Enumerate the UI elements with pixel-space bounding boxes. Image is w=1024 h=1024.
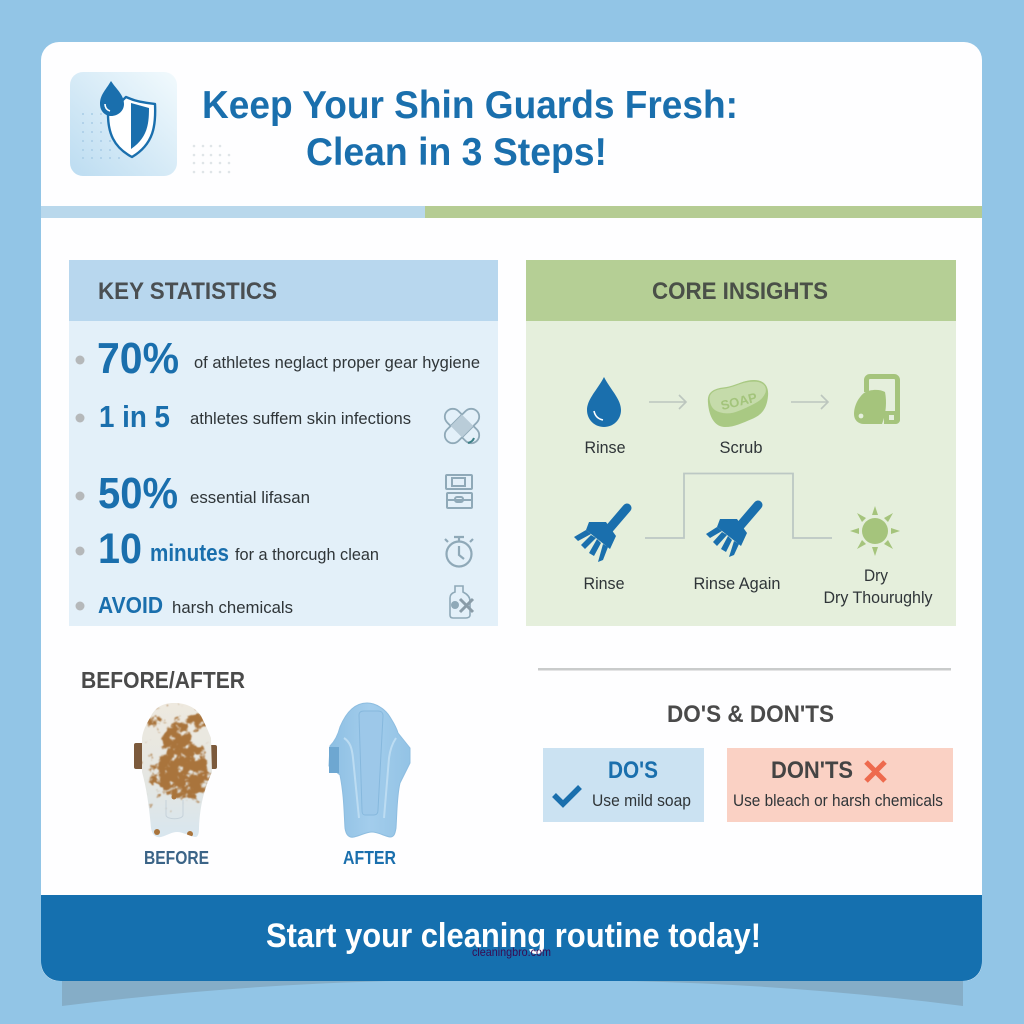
panel: don'ts: DON'TS: [771, 757, 853, 784]
stat rows: harsh chemicals: [172, 598, 293, 617]
arrow: [649, 395, 686, 409]
watermark: cleaningbro.com: [472, 945, 551, 959]
icon: check mark: [554, 787, 580, 804]
icon: stopwatch: [445, 537, 473, 566]
shin guard: after: [329, 703, 410, 837]
heading: do's and don'ts: DO'S & DON'TS: [667, 701, 834, 728]
label: before: BEFORE: [144, 848, 209, 868]
stat rows: AVOID: [98, 592, 163, 618]
icon: soap: [708, 380, 768, 427]
label: rinse: Rinse: [584, 438, 626, 457]
stat rows: 50%: [98, 469, 178, 518]
icon: bandage: [441, 405, 483, 447]
footer banner: Start your cleaning routine today!: [266, 917, 761, 955]
stat rows: essential lifasan: [190, 488, 310, 507]
icon: brush: [574, 508, 627, 562]
icon: brush: [706, 505, 758, 557]
stat rows: [76, 334, 480, 618]
header accent band: [41, 206, 982, 218]
connector line: [645, 474, 832, 538]
stat rows: for a thorcugh clean: [235, 545, 379, 564]
heading: core insights: CORE INSIGHTS: [652, 278, 828, 305]
icon: water drop: [587, 377, 621, 427]
icon: sun: [850, 506, 900, 556]
stat rows: 70%: [97, 334, 179, 383]
icon: bottle with cross: [450, 586, 473, 618]
heading: key statistics: KEY STATISTICS: [98, 278, 277, 305]
decorative dots: [193, 145, 230, 173]
label: after: AFTER: [343, 848, 396, 868]
heading: before/after: BEFORE/AFTER: [81, 667, 245, 693]
panel: do's: Use mild soap: [592, 791, 691, 810]
label: rinse: Rinse: [584, 574, 624, 593]
title: [202, 84, 738, 174]
stat rows: minutes: [150, 540, 229, 567]
label: dry: Dry Thourughly: [824, 588, 933, 607]
icon: water drop and shield: [70, 72, 177, 176]
panel: core insights: [526, 260, 956, 626]
panel: do's: DO'S: [608, 757, 658, 784]
icon: cross: [866, 762, 885, 781]
panel: don'ts: Use bleach or harsh chemicals: [733, 791, 943, 810]
stat rows: of athletes neglact proper gear hygiene: [194, 353, 480, 372]
icon: shin guard and tablet: [854, 376, 900, 424]
arrow: [791, 395, 828, 409]
stat rows: athletes suffem skin infections: [190, 409, 411, 428]
footer banner: [41, 895, 982, 981]
icon: soap: SOAP: [719, 390, 759, 413]
icon: toolbox: [446, 475, 472, 508]
label: rinse again: Rinse Again: [694, 574, 780, 593]
title: Clean in 3 Steps!: [306, 131, 607, 174]
stat rows: 10: [98, 525, 142, 573]
shin guard: before: [134, 700, 217, 840]
panel: do's: [543, 748, 704, 822]
title: Keep Your Shin Guards Fresh:: [202, 84, 738, 127]
panel: don'ts: [727, 748, 953, 822]
divider: [538, 668, 951, 670]
label: scrub: Scrub: [720, 438, 762, 457]
stat rows: 1 in 5: [99, 399, 170, 434]
panel: key statistics: [69, 260, 498, 626]
label: dry: Dry: [864, 566, 888, 585]
ribbon shadow under footer: [62, 981, 963, 1006]
label: dry: [824, 566, 933, 607]
